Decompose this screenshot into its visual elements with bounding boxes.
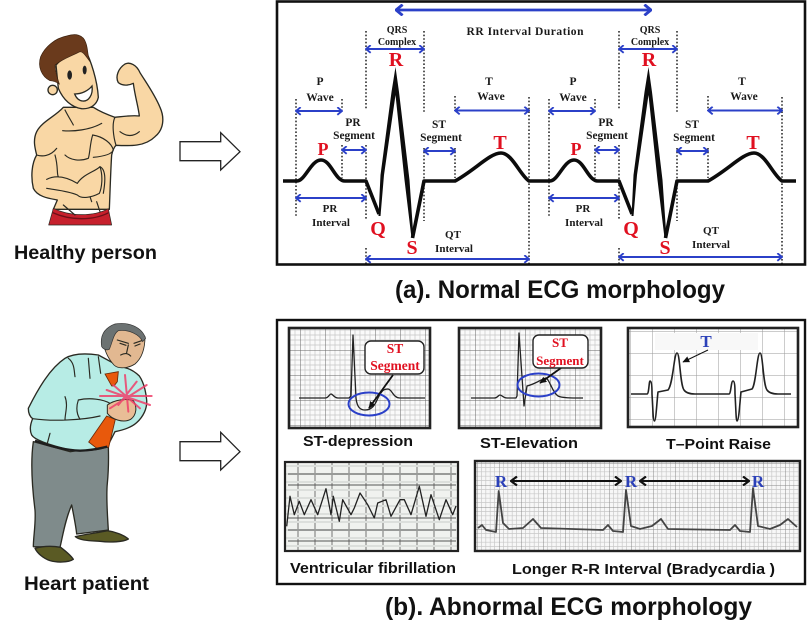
P wave label: P [316, 76, 324, 88]
red S: S [406, 237, 418, 259]
icon: healthy muscular man [32, 35, 163, 225]
patient's arm [33, 357, 110, 443]
QRS complex label: QRS [387, 25, 408, 36]
annotated second beat [549, 25, 782, 266]
label: heart patient: Heart patient [24, 574, 150, 595]
callout text: ST [387, 341, 403, 356]
ST segment arrow [424, 150, 455, 152]
ST-elevation trace [471, 333, 583, 406]
PR segment label: PR [598, 117, 614, 129]
QT interval label: Interval [435, 243, 473, 255]
PR segment label: PR [345, 117, 361, 129]
arrow: healthy person to normal ECG [180, 133, 240, 170]
R labels [495, 472, 765, 491]
white label strip [655, 333, 758, 350]
QRS complex label: Complex [378, 37, 416, 48]
R labels: R [495, 472, 508, 491]
ST segment label: Segment [673, 132, 715, 144]
man's shorts [49, 208, 112, 225]
fibrillation trace [287, 486, 456, 526]
patient's face features [117, 340, 142, 356]
callout pointer [369, 375, 393, 408]
P wave label: Wave [559, 92, 587, 104]
R labels: R [752, 472, 765, 491]
red Q: Q [370, 218, 386, 240]
ST segment callout [533, 335, 588, 368]
man's eyes [67, 66, 87, 80]
man's face [56, 49, 98, 109]
T wave label: Wave [730, 91, 758, 103]
red S: S [659, 237, 671, 259]
ST segment callout [365, 341, 424, 374]
PR interval label: PR [576, 203, 591, 215]
ST segment label: Segment [420, 132, 462, 144]
label: bradycardia: Longer R-R Interval (Bradycardia ) [512, 561, 775, 578]
man's ear [48, 85, 57, 95]
QT interval arrow [366, 258, 529, 260]
PR interval label: Interval [565, 217, 603, 229]
grid background [475, 461, 800, 551]
QT interval label: QT [445, 229, 462, 241]
QRS spike one [378, 67, 414, 238]
callout pointer [540, 368, 561, 383]
grid background [289, 328, 430, 428]
T wave arrow [708, 110, 782, 112]
T wave label: T [738, 76, 746, 88]
panel: abnormal ECG [277, 320, 805, 584]
R to R arrow two [640, 480, 749, 482]
man's torso and flexed arm [32, 63, 163, 209]
highlighted oval [518, 374, 560, 396]
RR interval arrow [396, 9, 651, 11]
red Q: Q [623, 218, 639, 240]
QT interval label: QT [703, 225, 720, 237]
normal ECG trace [283, 67, 796, 238]
patient's hands [107, 399, 136, 421]
icon: heart patient clutching chest [28, 323, 152, 562]
QRS complex arrow [366, 48, 424, 50]
ST segment arrow [677, 150, 708, 152]
patient's hair [101, 323, 146, 350]
QT interval label: Interval [692, 239, 730, 251]
red R: R [389, 49, 404, 71]
P wave interval arrow [296, 110, 342, 112]
red T: T [746, 132, 760, 154]
annotated first beat [296, 25, 529, 266]
patient's tie [89, 372, 118, 449]
QRS complex label: QRS [640, 25, 661, 36]
ST segment label: ST [432, 119, 446, 131]
chart: ST-depression [289, 328, 430, 428]
grid background [459, 328, 601, 428]
arrow: heart patient to abnormal ECG [180, 432, 240, 470]
ST-depression trace [299, 335, 425, 410]
label: T-point raise: T–Point Raise [666, 436, 771, 453]
R to R arrow one [511, 480, 621, 482]
patient's shirt [28, 354, 147, 451]
QRS complex arrow [619, 48, 677, 50]
baseline and P, T waves [283, 153, 796, 238]
frame [285, 462, 458, 551]
horizontal rules [288, 474, 456, 541]
label: healthy person: Healthy person [14, 243, 157, 264]
T wave label: Wave [477, 91, 505, 103]
PR interval arrow [549, 197, 619, 199]
PR interval label: Interval [312, 217, 350, 229]
callout text: Segment [370, 358, 420, 373]
R labels: R [625, 472, 638, 491]
PR segment arrow [342, 149, 366, 151]
P wave label: P [569, 76, 577, 88]
T-point trace [631, 353, 791, 421]
QRS spike two [632, 67, 666, 238]
ST segment label: ST [685, 119, 699, 131]
red P: P [570, 139, 582, 159]
T pointer [683, 350, 708, 362]
red R: R [642, 49, 657, 71]
QRS complex label: Complex [631, 37, 669, 48]
grid background [285, 462, 458, 551]
label: ventricular fibrillation: Ventricular fibrillation [290, 560, 456, 577]
patient's shoe, left [35, 546, 73, 562]
chart: ventricular fibrillation [285, 462, 458, 551]
red T: T [493, 132, 507, 154]
highlighted oval [348, 392, 390, 416]
man's hair [40, 35, 90, 84]
chart: T-point raise [628, 328, 798, 427]
patient's trousers [32, 442, 109, 547]
label: ST-elevation: ST-Elevation [480, 435, 578, 452]
T label: T [700, 332, 712, 351]
PR segment label: Segment [586, 130, 628, 142]
timing guide lines [296, 31, 529, 266]
patient's shoe, right [75, 531, 128, 542]
panel: normal ECG [277, 2, 805, 264]
timing guide lines [549, 31, 782, 266]
QT interval arrow [619, 256, 782, 258]
callout text: Segment [536, 353, 584, 368]
T wave label: T [485, 76, 493, 88]
RR interval label: RR Interval Duration [466, 26, 584, 38]
P wave interval arrow [549, 110, 595, 112]
PR interval arrow [296, 197, 366, 199]
PR interval label: PR [323, 203, 338, 215]
P wave label: Wave [306, 92, 334, 104]
man's smile [75, 86, 92, 101]
callout text: ST [552, 335, 568, 350]
PR segment arrow [595, 149, 619, 151]
red P: P [318, 139, 328, 159]
label: ST-depression: ST-depression [303, 433, 413, 450]
patient's belt [35, 441, 107, 451]
heading: normal ECG morphology: (a). Normal ECG morphology [395, 276, 725, 304]
patient's head [103, 330, 145, 368]
heading: abnormal ECG morphology: (b). Abnormal ECG morphology [385, 593, 752, 621]
man's waistband [53, 213, 109, 219]
muscle lines [37, 110, 139, 215]
chart: ST-elevation [459, 328, 601, 428]
bradycardia trace [478, 488, 797, 532]
T wave arrow [455, 110, 529, 112]
chest pain marks [100, 375, 152, 412]
grid background [628, 328, 798, 427]
chart: bradycardia [475, 461, 800, 551]
PR segment label: Segment [333, 130, 375, 142]
